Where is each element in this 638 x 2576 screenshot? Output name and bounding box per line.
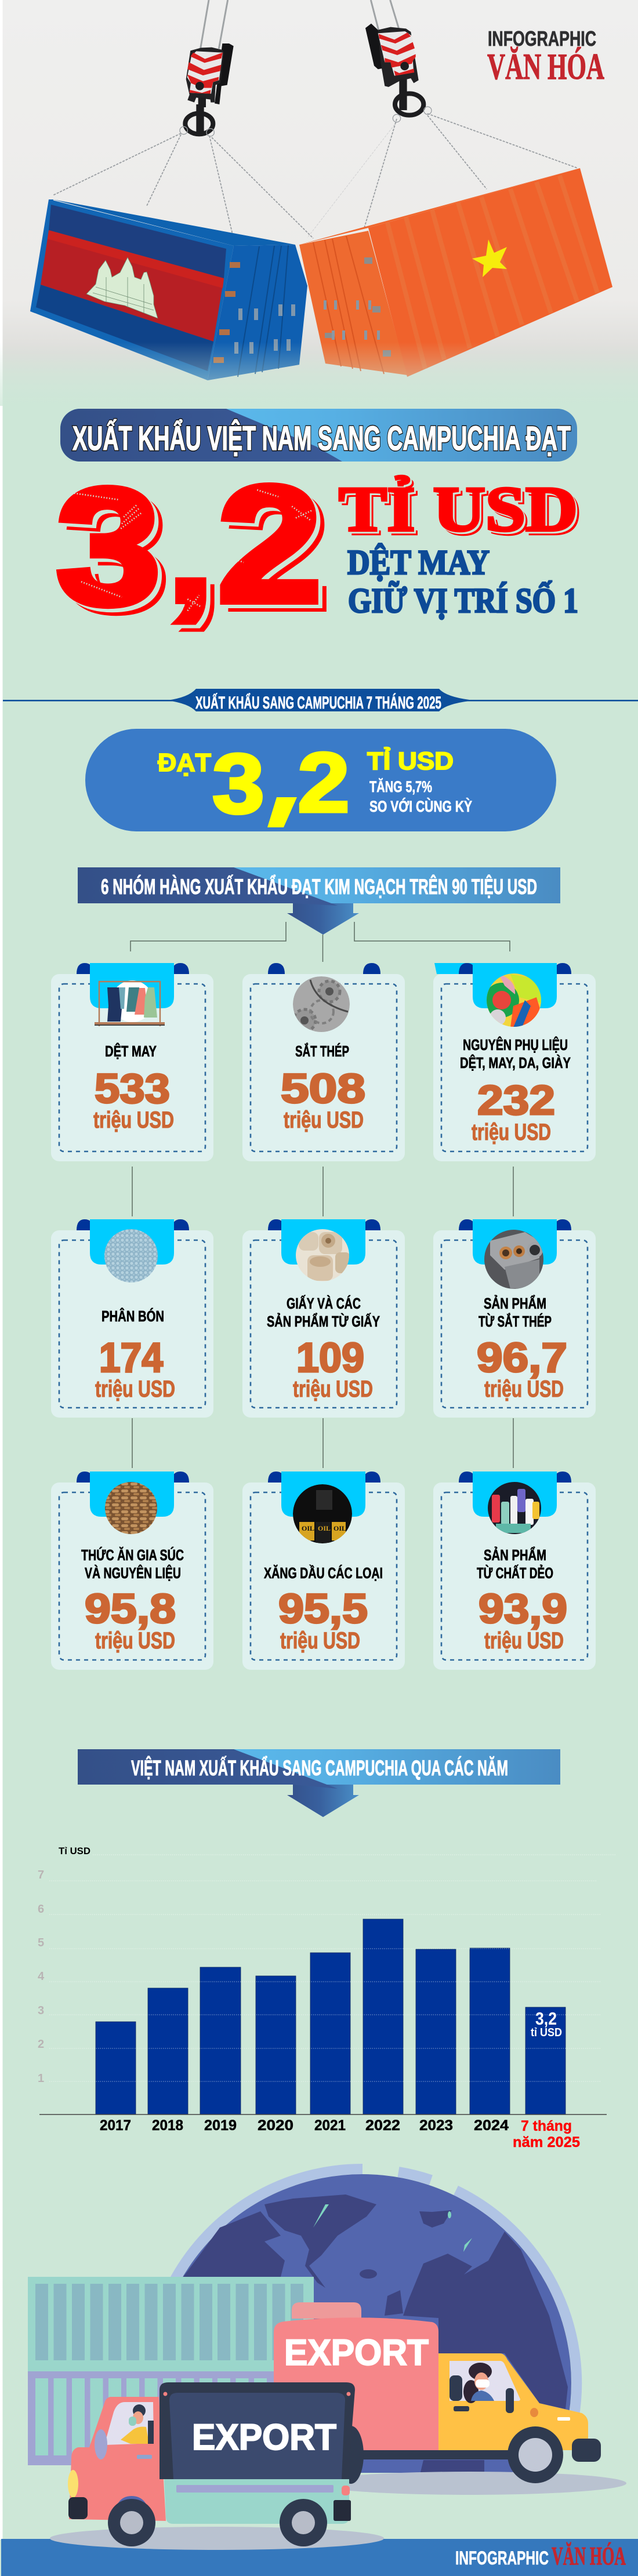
footer logo: [455, 2542, 626, 2570]
label: THỨC ĂN GIA SÚC: [81, 1546, 184, 1564]
unit: triệu USD: [293, 1376, 373, 1402]
logo: Infographic Văn Hóa: [487, 27, 604, 87]
card: thức ăn gia súc: [51, 1472, 213, 1670]
illustration: crane hooks lifting two containers: [0, 0, 638, 406]
unit: tỉ USD: TỈ USD: [340, 475, 579, 546]
x axis labels: 7 tháng: [521, 2118, 572, 2134]
headline figure: 3,2 tỉ USD: [56, 452, 581, 646]
x axis labels: năm 2025: [513, 2134, 580, 2150]
unit: triệu USD: [93, 1107, 174, 1133]
front truck shadow: [50, 2527, 384, 2550]
value: 533: [95, 1066, 170, 1112]
section banner: qua các năm: [78, 1749, 560, 1817]
Cambodia flag container: [30, 199, 307, 380]
title banner: [60, 409, 577, 462]
label line 2: DỆT, MAY, DA, GIÀY: [460, 1054, 571, 1071]
subhead: Dệt may: DỆT MAY: [347, 543, 490, 582]
number 3,2: 2: [226, 459, 330, 644]
rear truck shadow: [313, 2472, 626, 2495]
callout: đạt 3,2 tỉ USD: TỈ USD: [367, 747, 454, 775]
callout: đạt 3,2 tỉ USD: 2: [298, 735, 350, 830]
unit: triệu USD: [95, 1376, 175, 1402]
card: sắt thép: [242, 963, 405, 1161]
number 3,2: 3: [60, 458, 165, 642]
label line 2: TỪ CHẤT DẺO: [477, 1564, 553, 1582]
label: GIẤY VÀ CÁC: [287, 1295, 361, 1312]
number 3,2: ,: [168, 480, 213, 629]
unit: tỉ USD: TỈ USD: [339, 474, 578, 544]
y axis labels: 3: [38, 2004, 44, 2017]
value: 95,5: [278, 1586, 368, 1632]
icon: oil barrels: OIL: [302, 1524, 314, 1532]
x axis labels: 2024: [474, 2117, 509, 2134]
x axis labels: 2020: [258, 2117, 293, 2134]
icon: steel gears: [293, 976, 350, 1032]
number 3,2: 3: [64, 462, 169, 646]
front truck: EXPORT: [192, 2417, 336, 2458]
label line 2: SẢN PHẨM TỪ GIẤY: [267, 1313, 380, 1330]
icon: colourful textile rolls: [484, 973, 542, 1027]
value: 174: [99, 1335, 163, 1381]
label: DỆT MAY: [105, 1042, 157, 1060]
value: 95,8: [85, 1586, 176, 1632]
front truck: [68, 2382, 355, 2546]
icon: yellow star: [472, 239, 507, 277]
y axis labels: 5: [38, 1936, 44, 1949]
icon: steel pipes: [484, 1229, 544, 1289]
x axis labels: 2018: [152, 2117, 183, 2134]
card: chất dẻo: [433, 1472, 596, 1670]
x axis labels: 2019: [204, 2117, 237, 2134]
section banner: 6 nhóm hàng: [78, 867, 560, 935]
value: 232: [477, 1078, 555, 1124]
label: SẢN PHẨM: [484, 1295, 546, 1312]
y axis labels: 7: [38, 1869, 44, 1881]
card: xăng dầu: [242, 1472, 405, 1670]
unit: triệu USD: [484, 1376, 564, 1402]
left crane hook: [180, 0, 234, 136]
left chains: [53, 133, 313, 239]
logo: Infographic Văn Hóa: INFOGRAPHIC: [488, 27, 596, 50]
label: XĂNG DẦU CÁC LOẠI: [264, 1564, 383, 1582]
icon: oil barrels: OIL: [318, 1524, 331, 1532]
unit: triệu USD: [284, 1107, 364, 1133]
callout: đạt 3,2 tỉ USD: SO VỚI CÙNG KỲ: [369, 797, 472, 815]
number 3,2: 2: [222, 456, 326, 640]
value: 109: [296, 1335, 364, 1381]
number 3,2: ,: [176, 487, 221, 636]
card: nguyên phụ liệu: [433, 963, 596, 1161]
icon: Angkor Wat: [86, 257, 158, 318]
y axis labels: 6: [38, 1903, 44, 1916]
rear truck: [274, 2302, 601, 2484]
2025 bar value: 3,2: [535, 2008, 557, 2029]
container base fade: [0, 342, 638, 406]
footer bar: [1, 2539, 638, 2576]
x axis labels: 2023: [419, 2117, 453, 2134]
card: giấy: [242, 1219, 405, 1418]
callout: đạt 3,2 tỉ USD: TĂNG 5,7%: [369, 777, 432, 795]
icon: oil barrels: [293, 1484, 352, 1543]
front truck driver: [121, 2404, 154, 2444]
label: SẮT THÉP: [295, 1042, 349, 1060]
unit: triệu USD: [280, 1628, 360, 1654]
x axis labels: 2017: [100, 2117, 131, 2134]
number 3,2: [56, 452, 330, 646]
right chains: [307, 114, 578, 238]
section divider ribbon: [3, 689, 638, 713]
icon: paper rolls: [295, 1228, 350, 1282]
footer logo: INFOGRAPHIC: [455, 2548, 549, 2568]
callout: đạt 3,2 tỉ USD: 3: [212, 736, 264, 831]
number 3,2: ,: [172, 484, 217, 633]
x axis labels: 2022: [365, 2117, 400, 2134]
label: NGUYÊN PHỤ LIỆU: [463, 1036, 568, 1053]
icon: plastic bottles: [487, 1481, 543, 1535]
y axis labels: 4: [38, 1970, 45, 1983]
callout: đạt 3,2 tỉ USD: ,: [271, 762, 289, 827]
icon: fertilizer pellets: [104, 1229, 158, 1282]
x axis labels: 2021: [314, 2117, 346, 2134]
icon: animal feed pellets: [105, 1482, 157, 1534]
card: dệt may: [51, 963, 213, 1161]
callout: đạt 3,2 tỉ USD: ĐẠT: [158, 749, 211, 777]
section divider ribbon: XUẤT KHẨU SANG CAMPUCHIA 7 THÁNG 2025: [195, 693, 441, 713]
bars: [96, 1919, 566, 2114]
icon: oil barrels: OIL: [334, 1524, 346, 1532]
stacked containers: [28, 2277, 314, 2465]
unit: triệu USD: [472, 1120, 551, 1145]
callout: đạt 3,2 tỉ USD: [85, 729, 556, 831]
label line 2: VÀ NGUYÊN LIỆU: [85, 1564, 181, 1582]
globe: [171, 2164, 582, 2473]
unit: tỉ USD: TỈ USD: [342, 477, 581, 548]
value: 93,9: [478, 1586, 567, 1632]
card: phân bón: [51, 1219, 213, 1418]
icon: clothes rack: [95, 980, 165, 1026]
card: sản phẩm từ sắt thép: [433, 1219, 596, 1418]
bar chart: export by year: [38, 1845, 616, 2150]
subhead: giữ vị trí số 1: GIỮ VỊ TRÍ SỐ 1: [348, 582, 578, 620]
label: PHÂN BÓN: [102, 1307, 164, 1325]
Vietnam flag container: [299, 168, 612, 377]
2025 bar value: tỉ USD: [531, 2026, 562, 2039]
number 3,2: 2: [217, 452, 322, 637]
left margin strip: [0, 0, 2, 2539]
unit: triệu USD: [95, 1628, 175, 1654]
unit: triệu USD: [484, 1628, 564, 1654]
y axis labels: 2: [38, 2038, 44, 2051]
header background: [0, 0, 638, 406]
y axis labels: [38, 1869, 45, 2085]
right crane hook: [365, 0, 432, 122]
rear truck driver: [449, 2363, 494, 2403]
value: 508: [281, 1066, 365, 1112]
label: SẢN PHẨM: [484, 1546, 546, 1564]
label line 2: TỪ SẮT THÉP: [478, 1313, 552, 1330]
connector lines: [130, 922, 513, 1468]
illustration: export trucks and globe: [1, 2169, 638, 2576]
2025 bar value: [531, 2008, 562, 2039]
value: 96,7: [477, 1335, 567, 1381]
chart unit label: Tỉ USD: [59, 1845, 90, 1856]
number 3,2: 3: [56, 455, 161, 639]
y axis labels: 1: [38, 2072, 44, 2085]
rear truck: EXPORT: [284, 2332, 429, 2373]
x axis labels: [100, 2117, 580, 2150]
